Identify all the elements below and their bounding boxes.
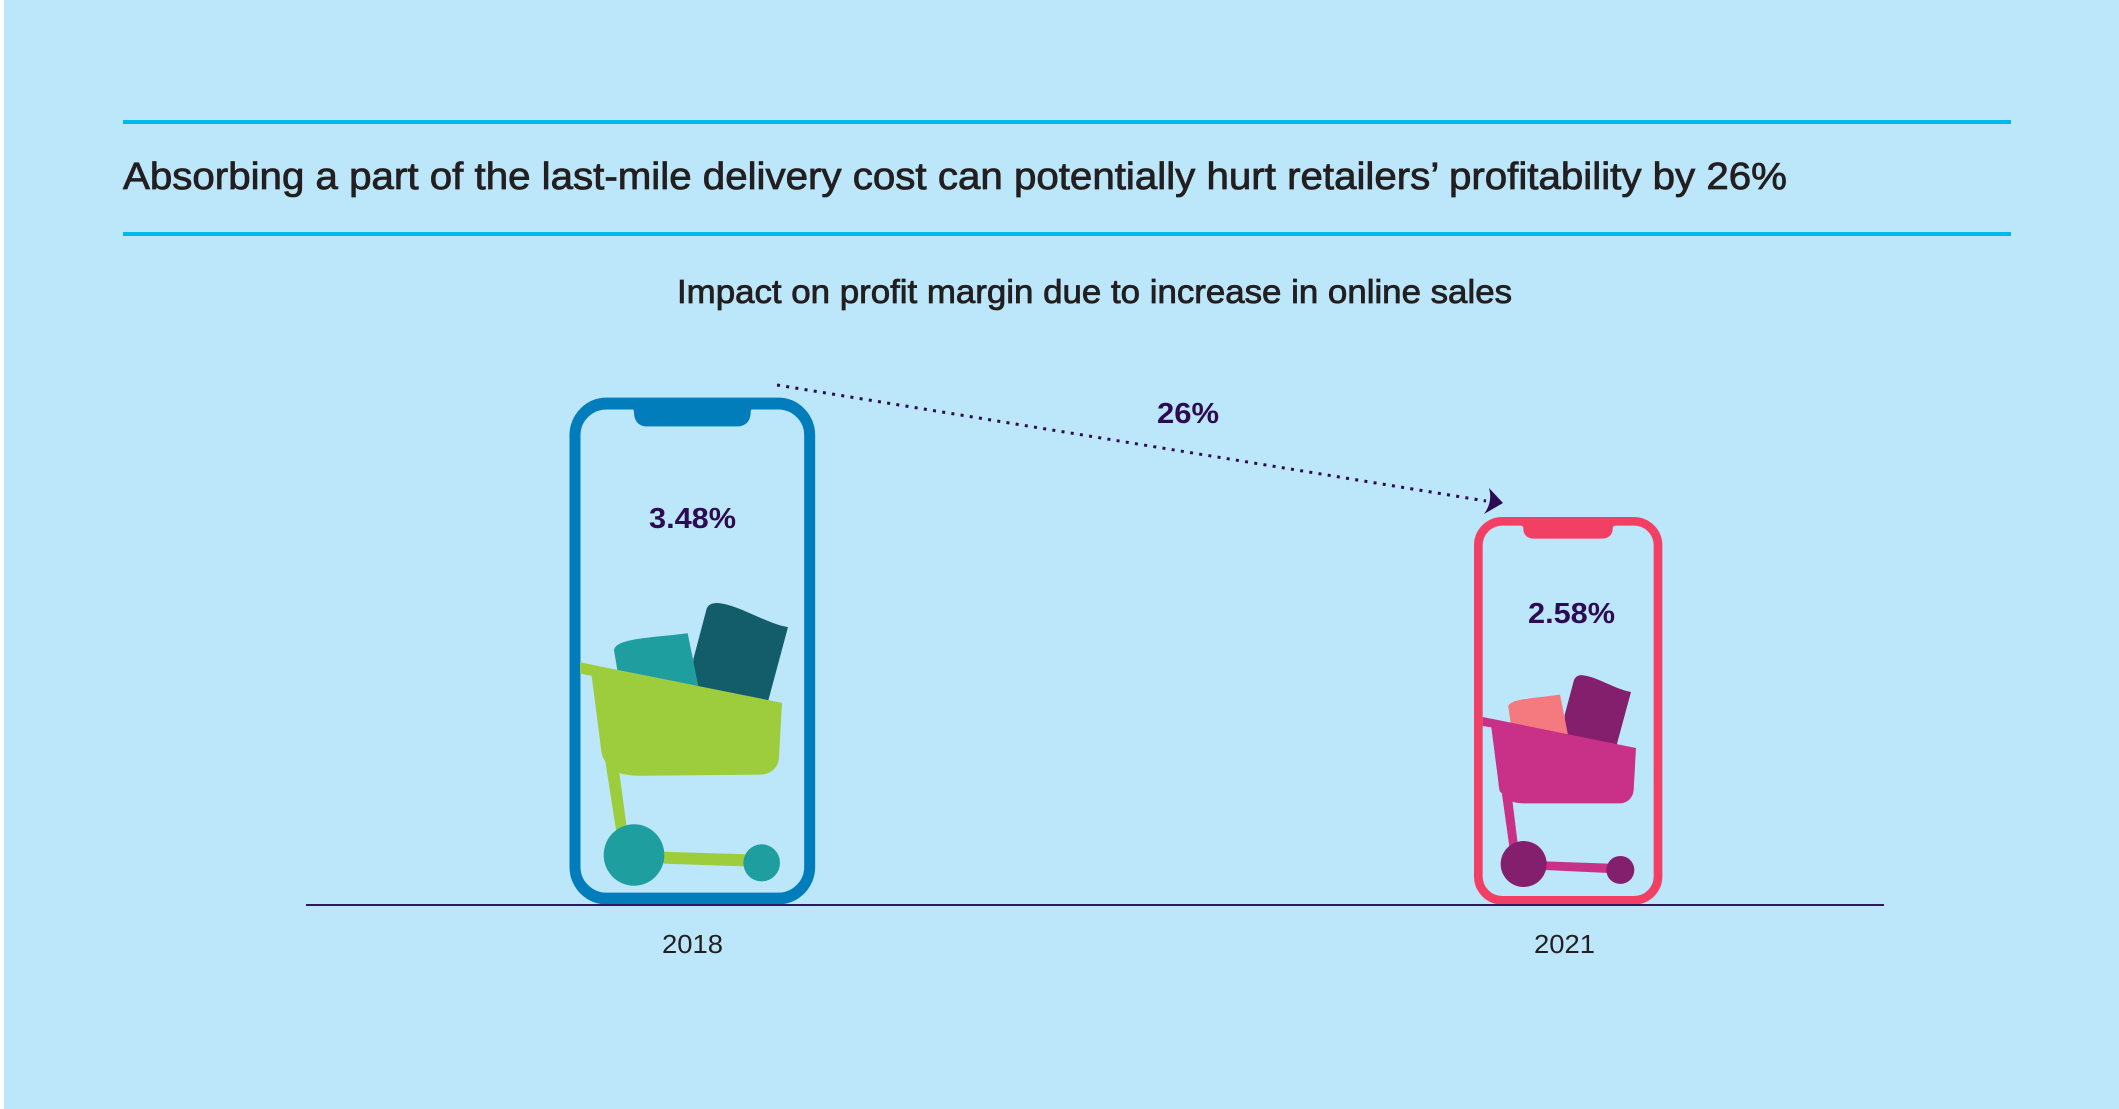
cart: dark parcel [693, 603, 788, 700]
cart: axle [663, 852, 745, 866]
title: Absorbing a part of the last-mile delivery cost can potentially hurt retailers’ profitability by 26% [123, 156, 1787, 198]
cart: basket [580, 662, 782, 776]
cart: salmon parcel [1508, 695, 1568, 735]
cart: axle [1545, 861, 1608, 873]
cart: leg [1502, 792, 1518, 847]
chart subtitle: Impact on profit margin due to increase in online sales [677, 274, 1512, 311]
cart: rear wheel [604, 824, 664, 886]
cart: front wheel [1606, 856, 1634, 884]
cart: basket [1483, 717, 1636, 803]
cart: front wheel [743, 844, 780, 881]
cart: teal parcel [614, 633, 698, 686]
change percentage: 26% [1157, 398, 1219, 430]
cart: dark parcel [1565, 675, 1631, 745]
cart: leg [605, 759, 627, 834]
year label 2018: 2018 [662, 929, 723, 959]
phone 2018 with shopping cart [575, 404, 810, 899]
baseline axis [306, 904, 1884, 906]
phone 2021 with shopping cart [1478, 521, 1658, 900]
cart: rear wheel [1501, 841, 1547, 887]
dotted arrow from 2018 to 2021 [777, 385, 1503, 514]
value 2018: 3.48% [649, 503, 736, 535]
year label 2021: 2021 [1534, 929, 1595, 959]
value 2021: 2.58% [1528, 598, 1615, 630]
